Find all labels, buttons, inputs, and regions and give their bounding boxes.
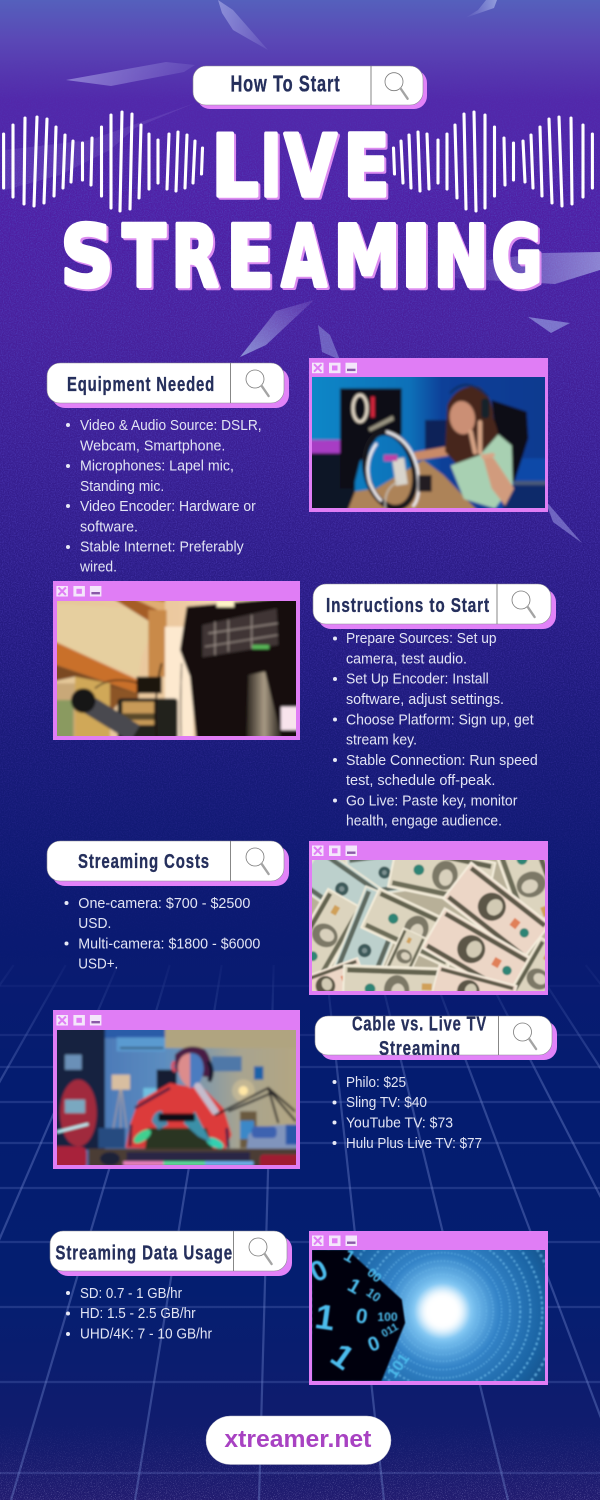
title: LIVE STREAMING: S: [62, 210, 116, 309]
title: LIVE STREAMING: R: [174, 210, 220, 309]
list: instructions to start: Stable Connection: Run speed: [346, 753, 538, 769]
list: streaming data usage: SD: 0.7 - 1 GB/hr: [80, 1286, 182, 1302]
search bar: instructions to start: [313, 584, 556, 629]
list: instructions to start: test, schedule off-peak.: [346, 773, 495, 789]
window frame: money: [283, 827, 572, 1025]
title: LIVE STREAMING: I: [262, 120, 284, 218]
photo: binary code tunnel: 10: [363, 1285, 384, 1305]
list: equipment needed: Video Encoder: Hardware or: [80, 499, 256, 515]
list: equipment needed: Microphones: Lapel mic,: [80, 459, 234, 475]
sound waveform right: [394, 112, 592, 211]
list: instructions to start: camera, test audio.: [346, 651, 467, 667]
photo: pile of dollar bills: [312, 860, 545, 991]
list: instructions to start: Set Up Encoder: Install: [346, 672, 489, 688]
title: LIVE STREAMING: V: [284, 118, 337, 216]
title: LIVE STREAMING: E: [226, 208, 274, 307]
title: LIVE STREAMING: I: [402, 210, 434, 309]
list: cable vs live tv streaming: YouTube TV: $73: [346, 1116, 453, 1132]
photo: video camera and microphone: [57, 601, 296, 736]
list: streaming costs: Multi-camera: $1800 - $6000: [78, 936, 260, 952]
search bar: how to start: How To Start: [230, 71, 340, 97]
title: LIVE STREAMING: S: [60, 208, 114, 307]
title: LIVE STREAMING: V: [286, 120, 339, 218]
title: LIVE STREAMING: I: [400, 208, 432, 307]
photo: gamer with headset and mic: [57, 1030, 296, 1165]
list: streaming data usage: UHD/4K: 7 - 10 GB/hr: [80, 1327, 212, 1343]
list: cable vs live tv streaming: [332, 1075, 482, 1152]
window frame: gamer: [52, 1010, 303, 1171]
title: LIVE STREAMING: T: [122, 208, 166, 307]
list: instructions to start: software, adjust settings.: [346, 692, 504, 708]
list: equipment needed: [66, 418, 262, 576]
photo: binary code tunnel: 1: [312, 1297, 338, 1338]
list: equipment needed: Stable Internet: Preferably: [80, 540, 244, 556]
title: LIVE STREAMING: M: [336, 210, 402, 309]
photo: binary code tunnel: 1: [344, 1275, 364, 1299]
photo: binary code tunnel: 0: [365, 1332, 383, 1357]
perspective grid floor: [0, 965, 600, 1500]
search bar: equipment needed: Equipment Needed: [67, 373, 215, 396]
list: equipment needed: Webcam, Smartphone.: [80, 438, 225, 454]
search bar: equipment needed: [47, 363, 289, 408]
search bar: cable vs live tv streaming: Streaming: [379, 1037, 461, 1060]
photo: binary code tunnel: 1: [324, 1337, 360, 1378]
title: LIVE STREAMING: M: [334, 208, 400, 307]
search bar: streaming costs: [47, 841, 289, 886]
list: cable vs live tv streaming: Philo: $25: [346, 1075, 406, 1091]
title: LIVE STREAMING: A: [282, 208, 327, 307]
search bar: streaming data usage: [50, 1231, 292, 1276]
photo: binary code tunnel: 1: [341, 1246, 358, 1267]
title: LIVE STREAMING: [60, 118, 544, 309]
window frame: data tunnel: [305, 1182, 573, 1440]
photo: binary code tunnel: [305, 1246, 545, 1381]
search bar: instructions to start: Instructions to Start: [326, 594, 490, 617]
list: instructions to start: Prepare Sources: Set up: [346, 631, 496, 647]
title: LIVE STREAMING: I: [260, 118, 282, 216]
title: LIVE STREAMING: E: [344, 118, 390, 216]
window frame: streamer with ring light: [307, 358, 553, 513]
title: LIVE STREAMING: L: [214, 120, 260, 218]
website pill: xtreamer.net: [206, 1416, 391, 1464]
title: LIVE STREAMING: E: [228, 210, 276, 309]
title: LIVE STREAMING: G: [494, 210, 544, 309]
list: equipment needed: Video & Audio Source: DSLR,: [80, 418, 262, 434]
title: LIVE STREAMING: N: [436, 210, 490, 309]
list: streaming costs: One-camera: $700 - $2500: [78, 896, 250, 912]
title: LIVE STREAMING: E: [346, 120, 392, 218]
search bar: cable vs live tv streaming: Cable vs. Live TV: [352, 1012, 487, 1036]
list: instructions to start: health, engage audience.: [346, 814, 502, 830]
title: LIVE STREAMING: A: [284, 210, 329, 309]
list: instructions to start: Go Live: Paste key, monitor: [346, 793, 518, 809]
photo: streamer girl at desk: [312, 377, 545, 508]
search bar: streaming data usage: Streaming Data Usage: [55, 1242, 233, 1264]
list: instructions to start: stream key.: [346, 733, 417, 749]
title: LIVE STREAMING: N: [434, 208, 488, 307]
photo: binary code tunnel: 0: [305, 1254, 333, 1289]
title: LIVE STREAMING: T: [124, 210, 168, 309]
search bar: how to start: [193, 66, 427, 109]
search bar: streaming costs: Streaming Costs: [78, 850, 210, 873]
title: LIVE STREAMING: L: [212, 118, 258, 216]
search bar: cable vs live tv streaming: [315, 1012, 557, 1060]
list: equipment needed: software.: [80, 519, 138, 535]
photo: binary code tunnel: 0: [354, 1305, 369, 1329]
list: streaming costs: USD.: [78, 916, 111, 932]
photo: binary code tunnel: 101: [384, 1350, 413, 1381]
list: cable vs live tv streaming: Hulu Plus Live TV: $77: [346, 1136, 482, 1152]
sound waveform left: [4, 112, 202, 211]
list: instructions to start: [333, 631, 538, 830]
list: streaming data usage: HD: 1.5 - 2.5 GB/hr: [80, 1306, 196, 1322]
title: LIVE STREAMING: G: [492, 208, 542, 307]
photo: binary code tunnel: 100: [377, 1310, 398, 1324]
title: LIVE STREAMING: R: [172, 208, 218, 307]
decorative glass shards: [5, 0, 600, 543]
list: streaming costs: [64, 896, 260, 972]
list: streaming costs: USD+.: [78, 956, 118, 972]
window frame: camera: [52, 581, 303, 743]
list: cable vs live tv streaming: Sling TV: $40: [346, 1095, 427, 1111]
list: instructions to start: Choose Platform: Sign up, get: [346, 712, 534, 728]
photo: binary code tunnel: 011: [379, 1321, 401, 1340]
list: equipment needed: wired.: [79, 560, 117, 576]
list: equipment needed: Standing mic.: [80, 479, 164, 495]
photo: binary code tunnel: 00: [364, 1265, 385, 1285]
website pill: xtreamer.net: xtreamer.net: [224, 1426, 371, 1453]
list: streaming data usage: [66, 1286, 212, 1343]
